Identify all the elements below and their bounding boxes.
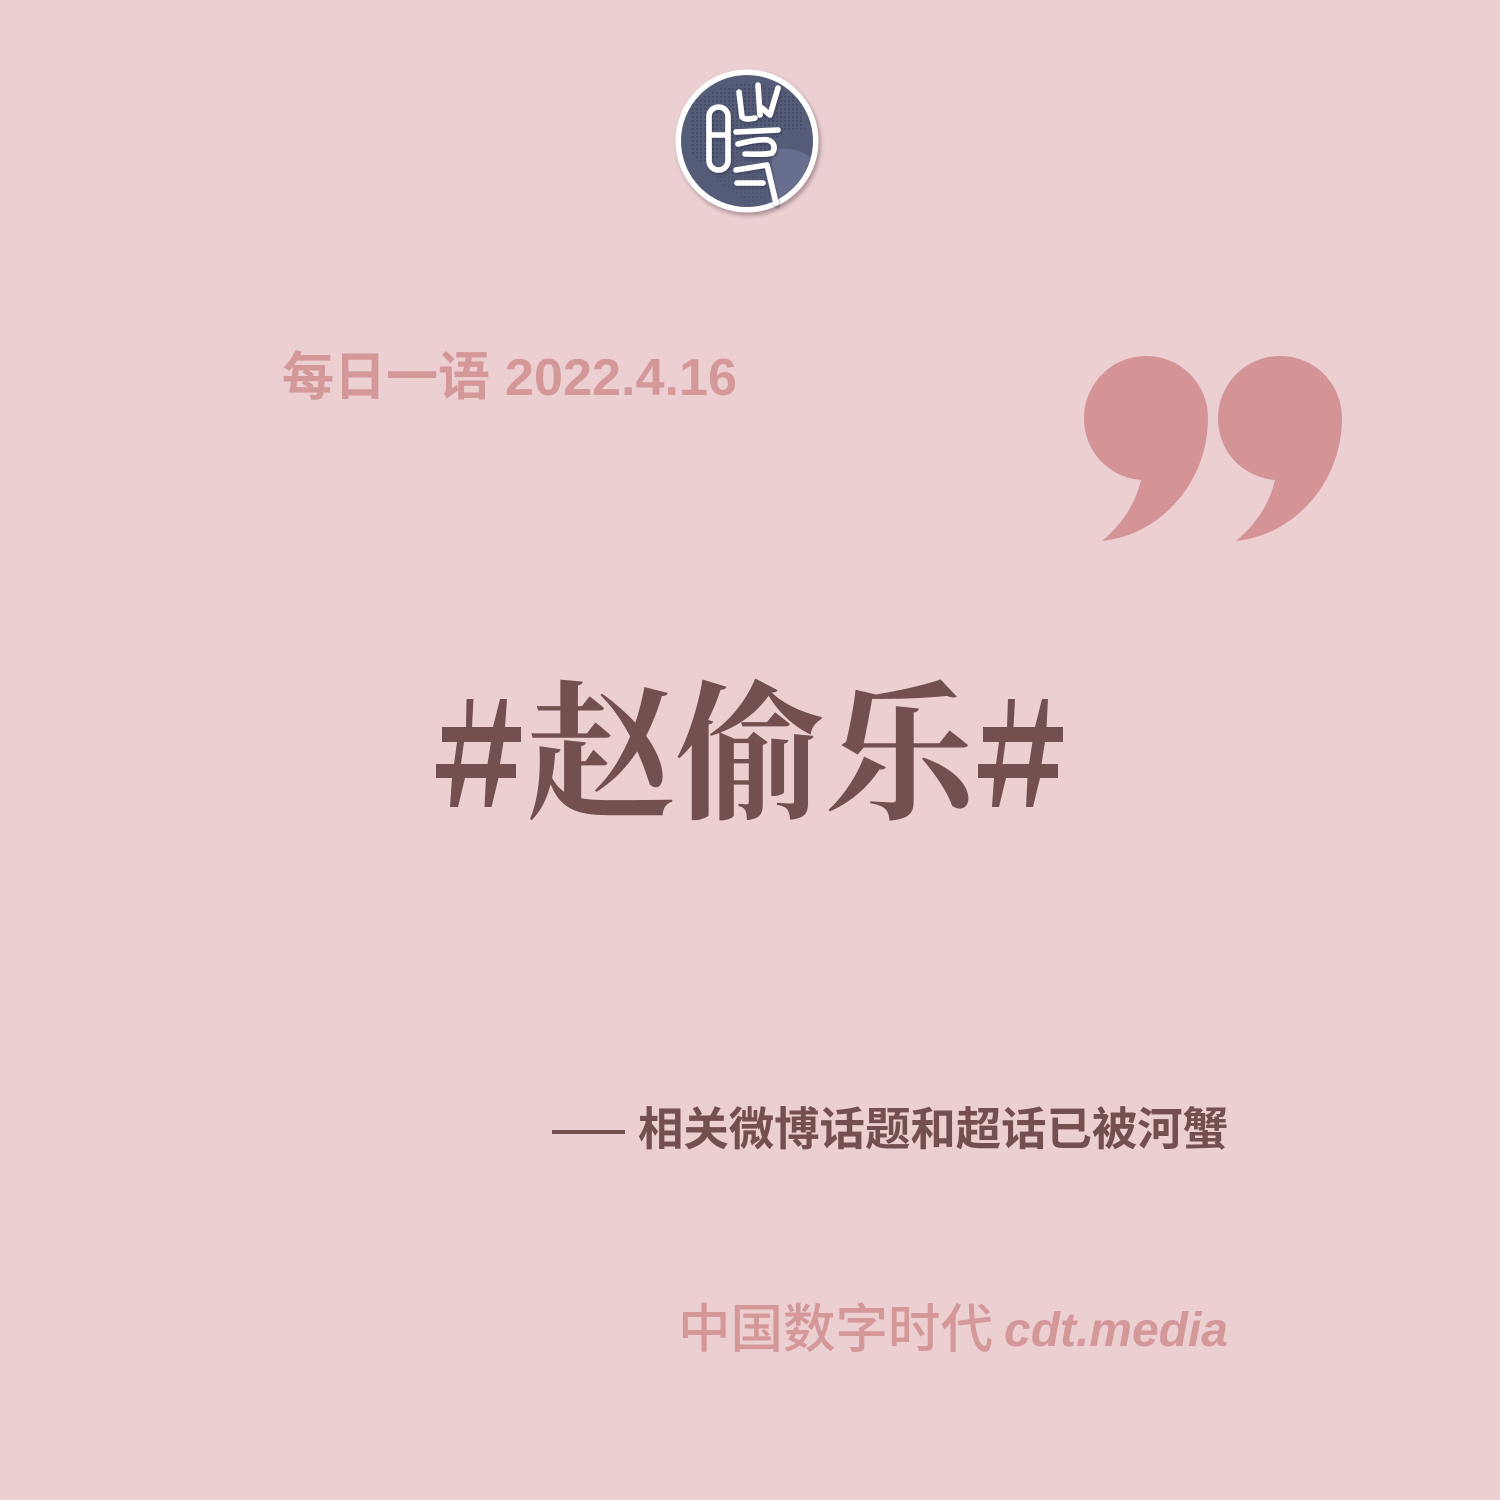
footer: source credit (678, 1287, 1228, 1363)
right hash mark (978, 699, 1063, 807)
icon: closing quotation marks (1084, 356, 1342, 541)
main title (436, 634, 1063, 850)
attribution line: 相关微博话题和超话已被河蟹 (638, 1093, 1228, 1159)
date heading: 2022.4.16 (505, 349, 737, 407)
left hash mark (436, 699, 521, 807)
title characters: 赵偷乐 (526, 634, 985, 850)
footer: source credit: 中国数字时代 (678, 1287, 993, 1363)
icon: round seal logo (676, 70, 818, 215)
footer: source credit: cdt.media (1004, 1304, 1228, 1357)
date heading: 每日一语 (282, 349, 490, 407)
